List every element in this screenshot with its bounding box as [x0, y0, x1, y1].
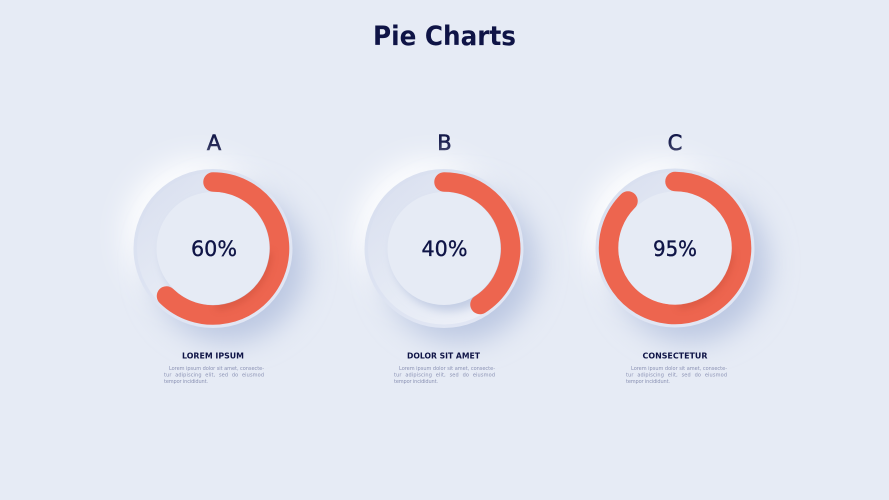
description text: Lorem ipsum dolor sit amet, consecte-	[631, 366, 727, 372]
heading: B: B	[437, 131, 452, 155]
value: 95%: 95%	[653, 237, 697, 261]
description text: tempor incididunt.	[394, 379, 438, 385]
description text	[394, 366, 495, 385]
title: Pie Charts	[373, 21, 516, 52]
label: LOREM IPSUM: LOREM IPSUM	[182, 352, 244, 360]
value: 40%: 40%	[422, 237, 468, 261]
description text	[164, 366, 264, 385]
description text: tur adipiscing elit, sed do eiusmod	[394, 372, 495, 378]
panel: chart C	[587, 131, 768, 385]
description text: tur adipiscing elit, sed do eiusmod	[626, 372, 727, 378]
label: DOLOR SIT AMET: DOLOR SIT AMET	[407, 352, 481, 360]
description text: Lorem ipsum dolor sit amet, consecte-	[399, 366, 495, 372]
heading: C: C	[668, 131, 682, 155]
panel: chart B	[356, 131, 537, 385]
description text: tempor incididunt.	[164, 379, 208, 385]
label: CONSECTETUR: CONSECTETUR	[642, 352, 708, 360]
donut chart C 95%	[587, 160, 768, 342]
description text: tempor incididunt.	[626, 379, 670, 385]
description text	[626, 366, 727, 385]
donut chart A 60%	[125, 160, 306, 342]
donut chart B 40%	[356, 160, 537, 342]
description text: Lorem ipsum dolor sit amet, consecte-	[169, 366, 264, 372]
description text: tur adipiscing elit, sed do eiusmod	[164, 372, 264, 378]
heading: A: A	[207, 131, 222, 155]
value: 60%: 60%	[191, 237, 237, 261]
panel: chart A	[125, 131, 306, 385]
